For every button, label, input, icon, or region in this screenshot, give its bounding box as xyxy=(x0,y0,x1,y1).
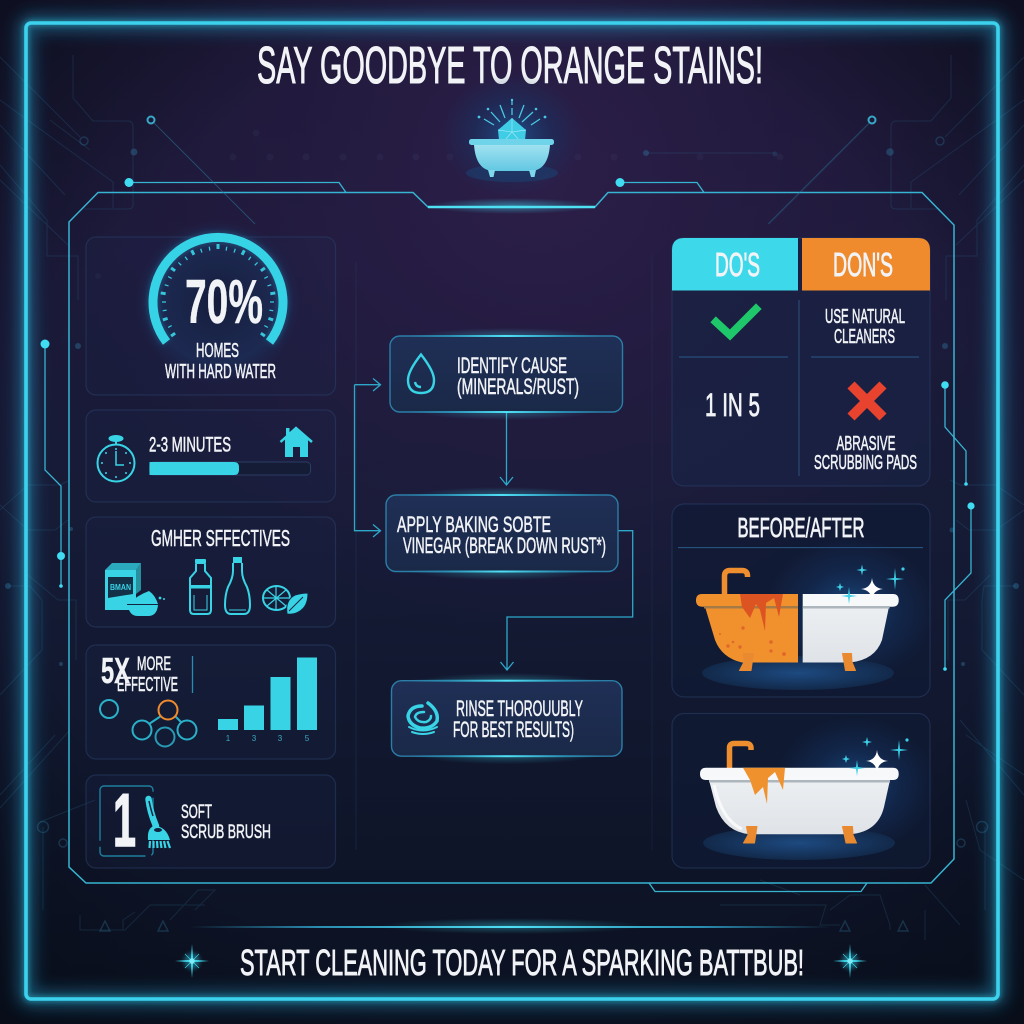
icon: water drop xyxy=(408,354,434,393)
panel: clean tub with drip xyxy=(672,714,935,868)
icon: sparkles xyxy=(836,564,905,604)
icon: baking soda box and bowl xyxy=(105,563,165,616)
icon: right star xyxy=(833,944,867,978)
natural cleaners text: CLEANERS xyxy=(834,326,895,348)
bar chart xyxy=(218,658,317,743)
brush label: SCRUB BRUSH xyxy=(181,822,271,843)
icon: red cross xyxy=(851,385,883,417)
icon: water swirl xyxy=(408,703,437,734)
icon: brush xyxy=(148,799,170,848)
do's header: DO'S xyxy=(715,246,760,283)
panel: before/after half-stained tub xyxy=(672,504,935,697)
bar chart: 3 xyxy=(252,734,257,743)
tub shadow xyxy=(703,826,895,860)
bar chart: 3 xyxy=(278,734,283,743)
footer divider line xyxy=(190,918,830,934)
panel: 5x more effective xyxy=(86,645,336,759)
icon: house xyxy=(280,428,312,457)
supplies heading: GMHER SFFECTIVES xyxy=(151,525,290,551)
step 1 text: (MINERALS/RUST) xyxy=(457,374,579,399)
step 3: rinse thoroughly xyxy=(392,673,622,764)
step 3 text: FOR BEST RESULTS) xyxy=(453,717,574,742)
step 3 text: RINSE THOROUUBLY xyxy=(456,696,583,721)
node diagram xyxy=(100,700,196,746)
tub shadow xyxy=(702,656,894,690)
icon: lemon and leaf xyxy=(263,586,308,614)
step 2 text: VINEGAR (BREAK DOWN RUST*) xyxy=(403,533,606,558)
more effective label xyxy=(117,654,178,696)
panel: do's and don'ts table xyxy=(672,238,930,486)
icon: spray bottle xyxy=(190,559,211,614)
abrasive pads text: SCRUBBING PADS xyxy=(814,452,917,474)
gauge caption: HOMES xyxy=(196,340,239,362)
brush label xyxy=(181,802,271,843)
icon: vinegar bottle xyxy=(225,557,250,614)
do's header xyxy=(672,238,798,290)
step 1 text: IDENTIFY CAUSE xyxy=(457,353,567,378)
step 3 text xyxy=(453,696,583,742)
panel: hard water gauge xyxy=(86,220,336,395)
step 1 text xyxy=(457,353,579,399)
icon: stopwatch xyxy=(98,435,134,482)
icon: baking soda box and bowl: BMAN xyxy=(110,583,131,592)
panel: soft scrub brush xyxy=(86,775,336,868)
flow connectors and arrows xyxy=(354,378,633,670)
step 2: apply baking soda xyxy=(386,487,618,580)
don'ts header xyxy=(802,238,930,290)
brush label: SOFT xyxy=(181,802,212,823)
natural cleaners text xyxy=(825,306,905,348)
more effective label: EFFECTIVE xyxy=(117,674,178,696)
icon: green check xyxy=(716,309,756,335)
icon: left star xyxy=(175,944,209,978)
before/after heading: BEFORE/AFTER xyxy=(738,512,864,543)
panel: time progress xyxy=(86,410,336,502)
abrasive pads text xyxy=(814,433,917,474)
icon: half orange half clean bathtub xyxy=(696,570,899,670)
more effective label: MORE xyxy=(137,654,171,675)
icon: sparkling bathtub with gem xyxy=(440,73,584,197)
icon: sparkles xyxy=(842,737,909,776)
abrasive pads text: ABRASIVE xyxy=(836,433,896,455)
number frame with 1: 1 xyxy=(113,778,136,862)
progress bar xyxy=(150,462,310,475)
step 1: identify cause xyxy=(390,328,622,420)
panel: supplies xyxy=(86,517,336,627)
lit side circuit lines xyxy=(40,116,975,671)
step 2 text: APPLY BAKING SOBTE xyxy=(397,512,551,537)
don'ts header: DON'S xyxy=(833,246,893,283)
5x value: 5X xyxy=(101,650,130,691)
gauge caption: WITH HARD WATER xyxy=(165,361,276,383)
gauge caption xyxy=(165,340,276,383)
bar chart: 5 xyxy=(305,734,310,743)
gauge value: 70% xyxy=(185,268,263,337)
1 in 5 stat: 1 IN 5 xyxy=(705,387,760,423)
gauge xyxy=(136,220,300,384)
inner tech frame xyxy=(69,178,954,892)
natural cleaners text: USE NATURAL xyxy=(825,306,905,328)
bar chart: 1 xyxy=(226,734,231,743)
icon: white bathtub with orange stain xyxy=(700,744,899,843)
duration text: 2-3 MINUTES xyxy=(149,434,231,456)
step 2 text xyxy=(397,512,606,558)
